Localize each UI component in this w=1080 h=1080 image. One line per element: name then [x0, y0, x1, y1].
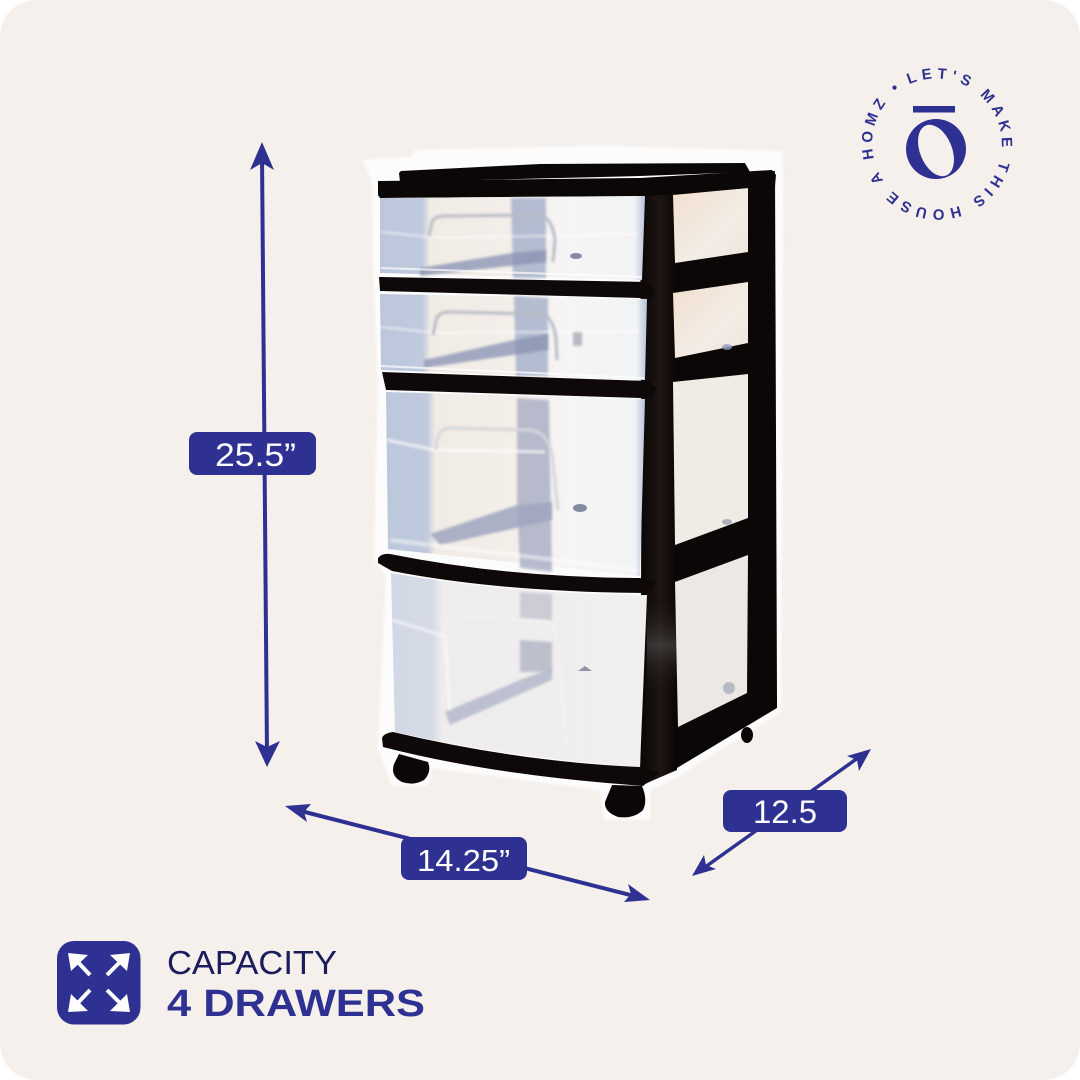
wheel: front left [393, 754, 429, 784]
drawer 3 [386, 392, 645, 576]
logo mark [906, 106, 966, 182]
height label: 25.5” [215, 437, 296, 473]
post highlight [647, 590, 677, 700]
side window 2 [673, 282, 748, 358]
front post [640, 186, 677, 786]
side panel frame [640, 171, 777, 785]
width dimension arrow [285, 804, 650, 902]
height label [189, 432, 316, 475]
drawer 2 [380, 294, 647, 380]
divider bar 2 [382, 372, 656, 398]
depth dimension arrow [692, 749, 871, 876]
product photo: four drawer storage cart [362, 146, 783, 820]
rear wheel [741, 727, 753, 743]
side window details [722, 344, 735, 694]
circular tagline: LET'S MAKE THIS HOUSE A HOMZ • [862, 68, 1012, 220]
divider bar 3 [378, 554, 656, 593]
capacity icon [57, 941, 140, 1024]
side window 3 [673, 374, 748, 545]
side window 1 [673, 188, 748, 263]
white cut-out halo [362, 146, 783, 820]
divider bar 1 [379, 277, 654, 298]
brand logo badge [862, 68, 1012, 220]
top frame bar [378, 170, 776, 198]
depth label [723, 790, 847, 832]
wheel: front right [605, 785, 645, 817]
width label: 14.25” [417, 843, 510, 878]
height dimension arrow [189, 142, 316, 767]
bottom bar [382, 732, 660, 786]
capacity value: 4 DRAWERS [167, 983, 425, 1025]
depth label: 12.5 [753, 794, 817, 830]
side window 4 [675, 555, 748, 727]
drawer 4 [391, 573, 647, 767]
top lid [399, 163, 750, 182]
drawer 1 [380, 196, 645, 280]
width label [401, 837, 527, 880]
capacity caption: CAPACITY [167, 944, 337, 981]
